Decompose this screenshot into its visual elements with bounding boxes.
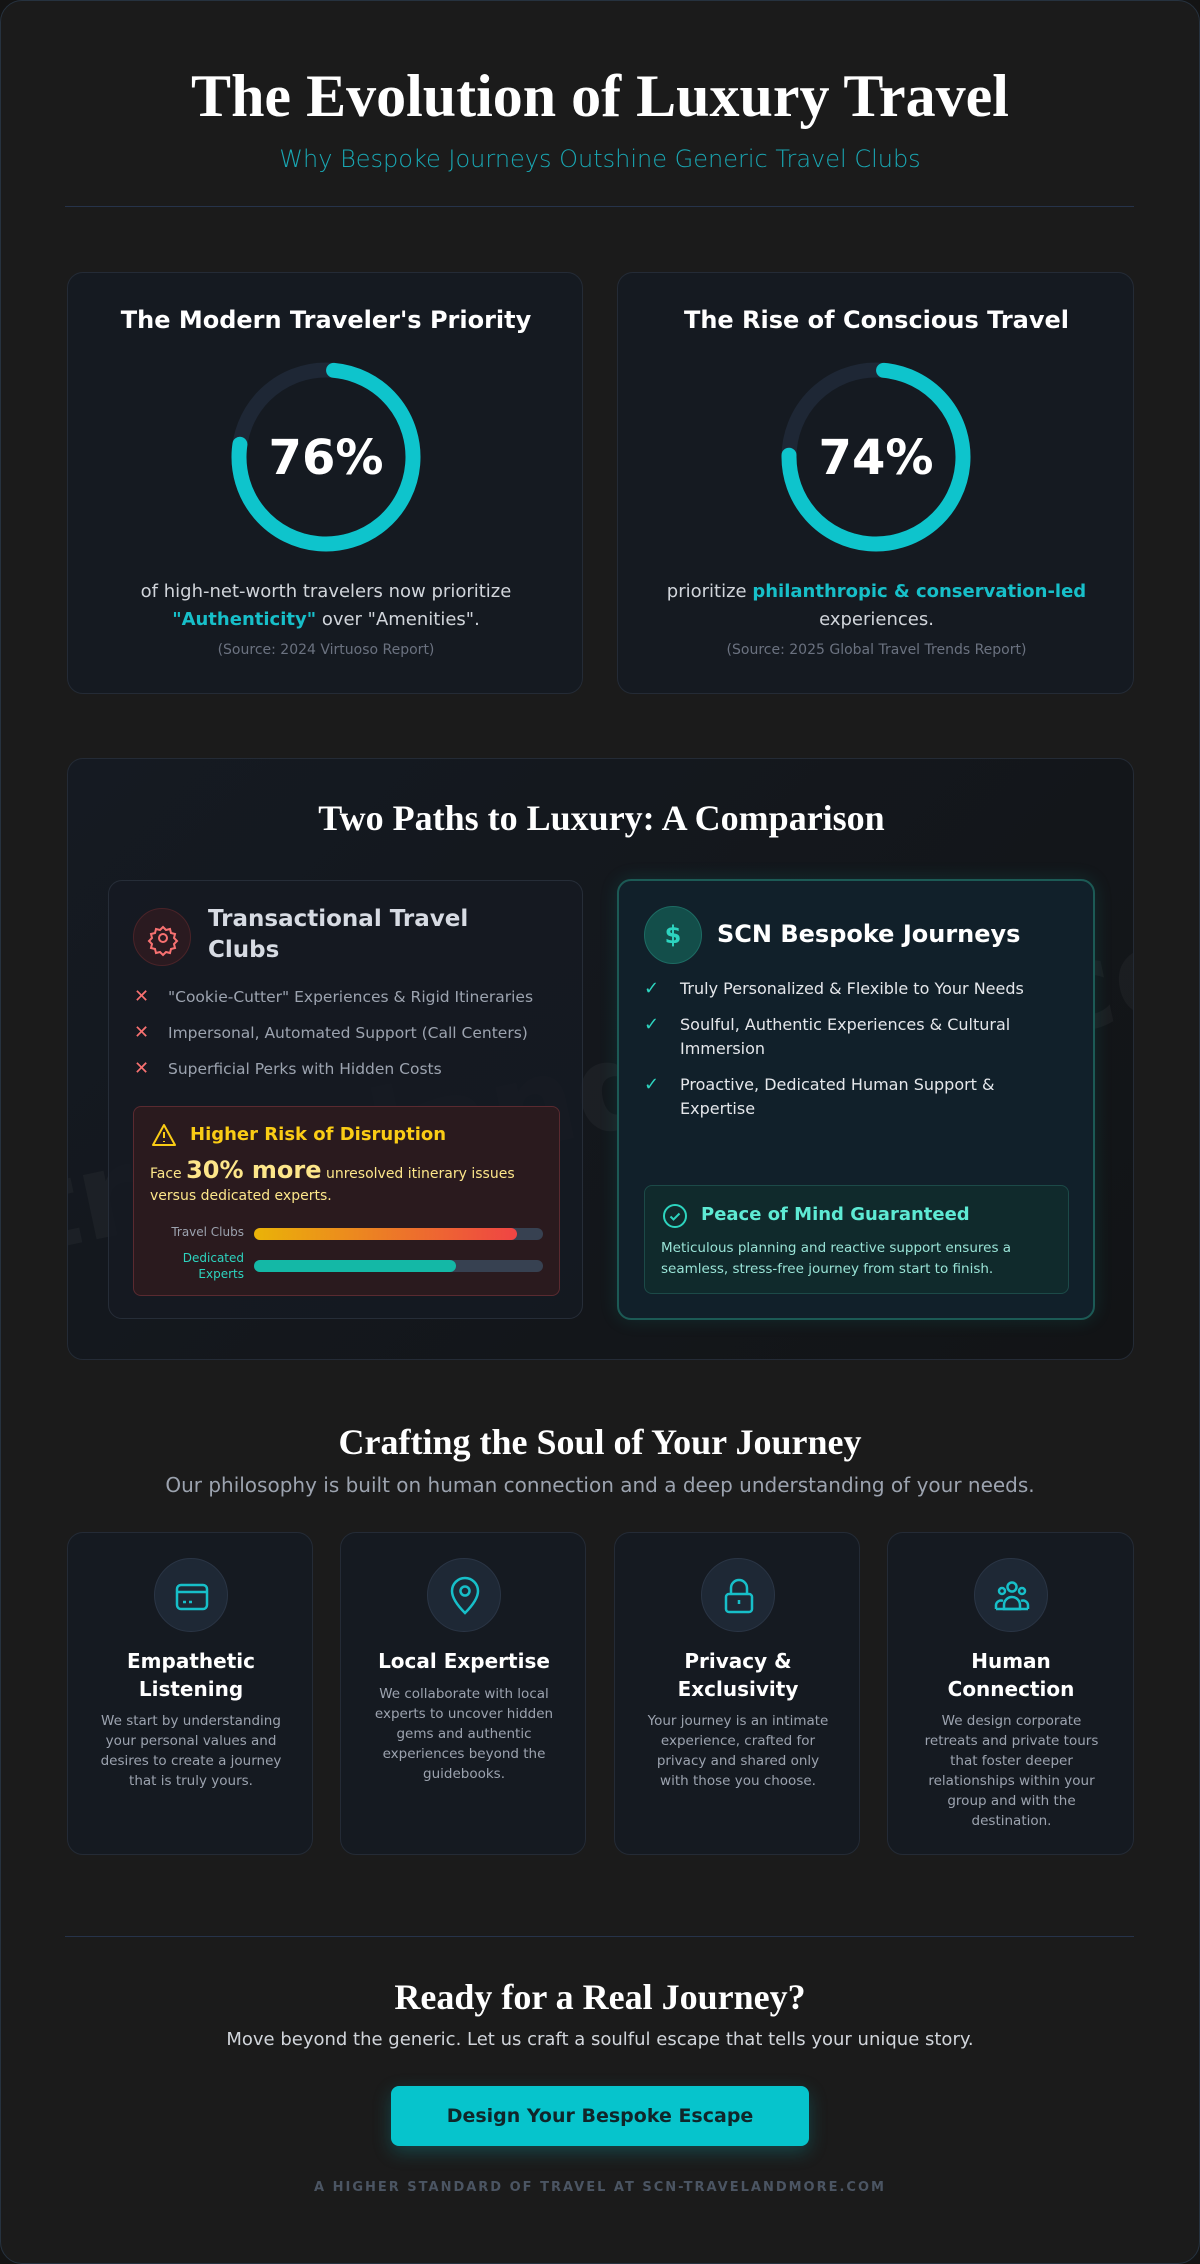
ring chart 76%: 76% — [269, 430, 383, 486]
card: human connection: Human — [971, 1649, 1051, 1673]
callout: higher risk: Higher Risk of Disruption — [190, 1124, 446, 1145]
list: benefits: Soulful, Authentic Experiences & Cultural Immersion — [680, 1015, 1010, 1058]
callout: peace of mind: Peace of Mind Guaranteed — [701, 1204, 970, 1225]
description — [667, 581, 1086, 630]
card: human connection — [887, 1532, 1134, 1855]
card title: Transactional Travel — [208, 906, 468, 932]
description: experiences. — [819, 609, 934, 630]
description: of high-net-worth travelers now prioritize — [141, 581, 511, 602]
footer: A HIGHER STANDARD OF TRAVEL AT SCN-TRAVELANDMORE.COM — [314, 2180, 886, 2195]
bar chart: Dedicated — [183, 1251, 244, 1265]
icon: dollar: $ — [665, 921, 681, 949]
callout: peace of mind — [644, 1185, 1069, 1294]
ring chart 76% — [232, 362, 420, 552]
ring chart 74% — [782, 362, 970, 552]
list: benefits: ✓ — [644, 1014, 659, 1035]
heading: crafting the soul: Crafting the Soul of Your Journey — [338, 1422, 862, 1462]
list: drawbacks: ✕ — [134, 986, 149, 1007]
callout: higher risk: Face 30% more unresolved itinerary issues — [150, 1156, 515, 1184]
source: (Source: 2025 Global Travel Trends Report) — [727, 642, 1026, 658]
button — [391, 2086, 809, 2146]
bar chart — [171, 1225, 543, 1281]
card: empathetic listening: Listening — [139, 1677, 243, 1701]
icon: warning — [152, 1124, 176, 1146]
card: empathetic listening: Empathetic — [127, 1649, 255, 1673]
heading: The Modern Traveler's Priority — [121, 306, 531, 334]
list: drawbacks — [134, 986, 533, 1079]
list: benefits: ✓ — [644, 978, 659, 999]
card: empathetic listening: We start by understanding your personal values and desires to create a journey that is truly yours. — [101, 1713, 281, 1789]
icon: dollar — [644, 906, 702, 964]
callout: higher risk: versus dedicated experts. — [150, 1188, 332, 1204]
text: philosophy: Our philosophy is built on human connection and a deep understanding of your needs. — [165, 1473, 1035, 1497]
card: privacy — [614, 1532, 860, 1855]
list: drawbacks: "Cookie-Cutter" Experiences & Rigid Itineraries — [168, 988, 533, 1006]
list: benefits: ✓ — [644, 1074, 659, 1095]
card: empathetic listening — [67, 1532, 313, 1855]
heading: CTA: Ready for a Real Journey? — [394, 1977, 806, 2017]
list: drawbacks: ✕ — [134, 1058, 149, 1079]
list: benefits — [644, 978, 1024, 1118]
icon: gear — [133, 908, 191, 966]
bar chart: Experts — [198, 1267, 244, 1281]
card: privacy: Privacy & — [684, 1649, 792, 1673]
card: local expertise: We collaborate with local experts to uncover hidden gems and authentic experiences beyond the guidebooks. — [375, 1686, 553, 1782]
list: benefits: Truly Personalized & Flexible to Your Needs — [680, 979, 1024, 998]
panel: modern traveler's priority — [67, 272, 583, 694]
card: local expertise: Local Expertise — [378, 1649, 550, 1673]
callout: higher risk — [133, 1106, 560, 1296]
description — [141, 581, 511, 630]
subtitle: Why Bespoke Journeys Outshine Generic Travel Clubs — [279, 145, 921, 173]
description: prioritize philanthropic & conservation-led — [667, 581, 1086, 602]
card: transactional clubs — [108, 880, 583, 1319]
description: "Authenticity" over "Amenities". — [172, 609, 480, 630]
list: drawbacks: Superficial Perks with Hidden Costs — [168, 1060, 442, 1078]
feature cards — [67, 1532, 1134, 1855]
card: human connection: We design corporate retreats and private tours that foster deeper relationships within your group and with the destination. — [925, 1713, 1098, 1829]
button: Design Your Bespoke Escape — [447, 2105, 753, 2127]
panel: comparison — [67, 758, 1134, 1360]
bar chart: Travel Clubs — [171, 1225, 244, 1239]
card: privacy: Exclusivity — [678, 1677, 798, 1701]
list: drawbacks: Impersonal, Automated Support (Call Centers) — [168, 1024, 528, 1042]
title: The Evolution of Luxury Travel — [191, 63, 1009, 129]
card: human connection: Connection — [948, 1677, 1074, 1701]
panel: conscious travel — [617, 272, 1134, 694]
list: benefits: Proactive, Dedicated Human Support & Expertise — [680, 1075, 995, 1118]
list: drawbacks: ✕ — [134, 1022, 149, 1043]
card: privacy: Your journey is an intimate experience, crafted for privacy and shared only with those you choose. — [648, 1713, 828, 1789]
heading: The Rise of Conscious Travel — [684, 306, 1069, 334]
card: SCN bespoke — [617, 879, 1095, 1320]
text: CTA: Move beyond the generic. Let us craft a soulful escape that tells your unique story. — [226, 2029, 974, 2050]
source: (Source: 2024 Virtuoso Report) — [218, 642, 434, 658]
card title — [208, 906, 468, 963]
card title: SCN Bespoke Journeys — [717, 920, 1020, 948]
ring chart 74%: 74% — [819, 430, 933, 486]
callout: peace of mind: Meticulous planning and reactive support ensures a seamless, stress-free journey from start to finish. — [661, 1240, 1011, 1277]
card title: Clubs — [208, 937, 279, 963]
heading: Two Paths to Luxury: A Comparison — [318, 798, 885, 838]
card: local expertise — [340, 1532, 586, 1855]
